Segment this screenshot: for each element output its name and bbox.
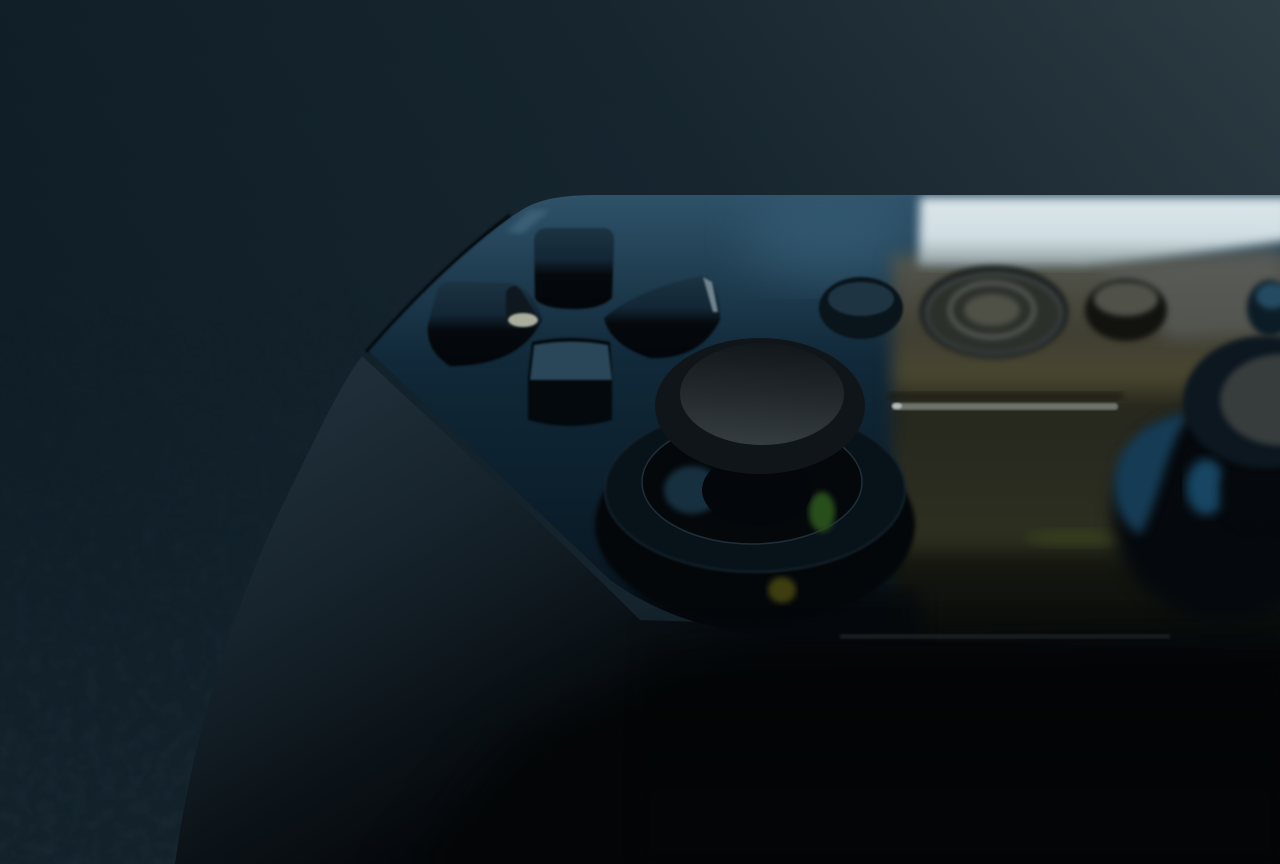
right thumbstick (blurred) [1113, 336, 1280, 620]
d-pad up [534, 228, 614, 309]
stick base ring [605, 408, 905, 572]
left thumbstick [595, 338, 915, 623]
d-pad right [604, 276, 720, 358]
blue reflection [664, 466, 720, 514]
cap rim [1183, 336, 1280, 468]
bottom edge highlight [840, 634, 1170, 639]
base hole [642, 420, 862, 544]
light slit reflection [892, 403, 1118, 410]
center small left button [819, 277, 903, 339]
green reflection [1032, 530, 1111, 548]
warm reflection on right of face [892, 255, 1280, 640]
right edge blue button [1247, 280, 1280, 336]
d-pad down [528, 338, 612, 426]
d-pad left [428, 282, 542, 366]
yellow reflection [768, 577, 796, 603]
green reflection [809, 492, 835, 532]
cap top [1220, 354, 1280, 446]
dark band above slit [888, 392, 1123, 400]
corner highlight streak [509, 210, 546, 234]
stick cap [655, 338, 865, 474]
lower shadow over controller [640, 620, 1280, 864]
bright window glare [918, 197, 1280, 266]
stick shaft [702, 454, 812, 526]
center ring button [922, 268, 1066, 356]
glossy controller face [360, 190, 1280, 650]
blue sheen near glare [752, 208, 908, 290]
controller grip [175, 356, 1280, 864]
blue base crescent [1114, 412, 1190, 535]
outer shadow disc [595, 427, 915, 623]
center small right button [1085, 279, 1167, 341]
grey right side reflection [1100, 245, 1280, 340]
face edge shadow [366, 215, 510, 352]
bottom shadow [400, 652, 1280, 864]
dark strip above lower edge [642, 590, 889, 622]
d-pad buttons [428, 228, 720, 426]
